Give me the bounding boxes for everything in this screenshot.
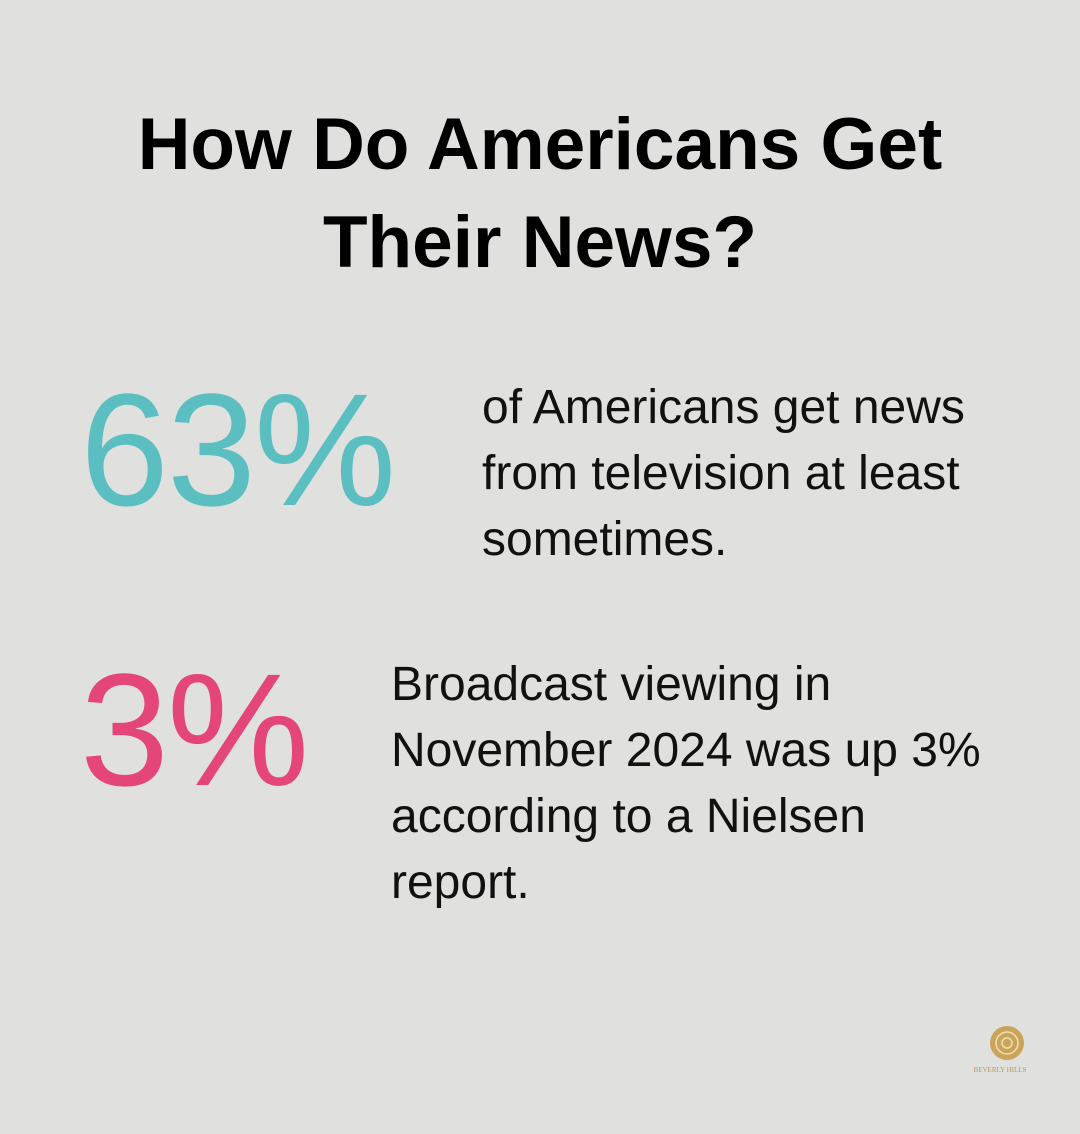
icon: logo emblem <box>990 1026 1024 1060</box>
title <box>138 104 942 283</box>
text 3%: Broadcast viewing in November 2024 was up 3% according to a Nielsen report. <box>391 658 981 909</box>
text 63%: of Americans get news from television at least sometimes. <box>482 381 965 566</box>
stat: 3% <box>80 640 981 909</box>
title: Their News? <box>323 202 757 283</box>
stat: 63% <box>80 360 965 566</box>
logo <box>974 1026 1026 1074</box>
number 63%: 63% <box>80 360 394 539</box>
number 3%: 3% <box>80 640 307 819</box>
title: How Do Americans Get <box>138 104 942 185</box>
logo: BEVERLY HILLS <box>974 1066 1026 1074</box>
